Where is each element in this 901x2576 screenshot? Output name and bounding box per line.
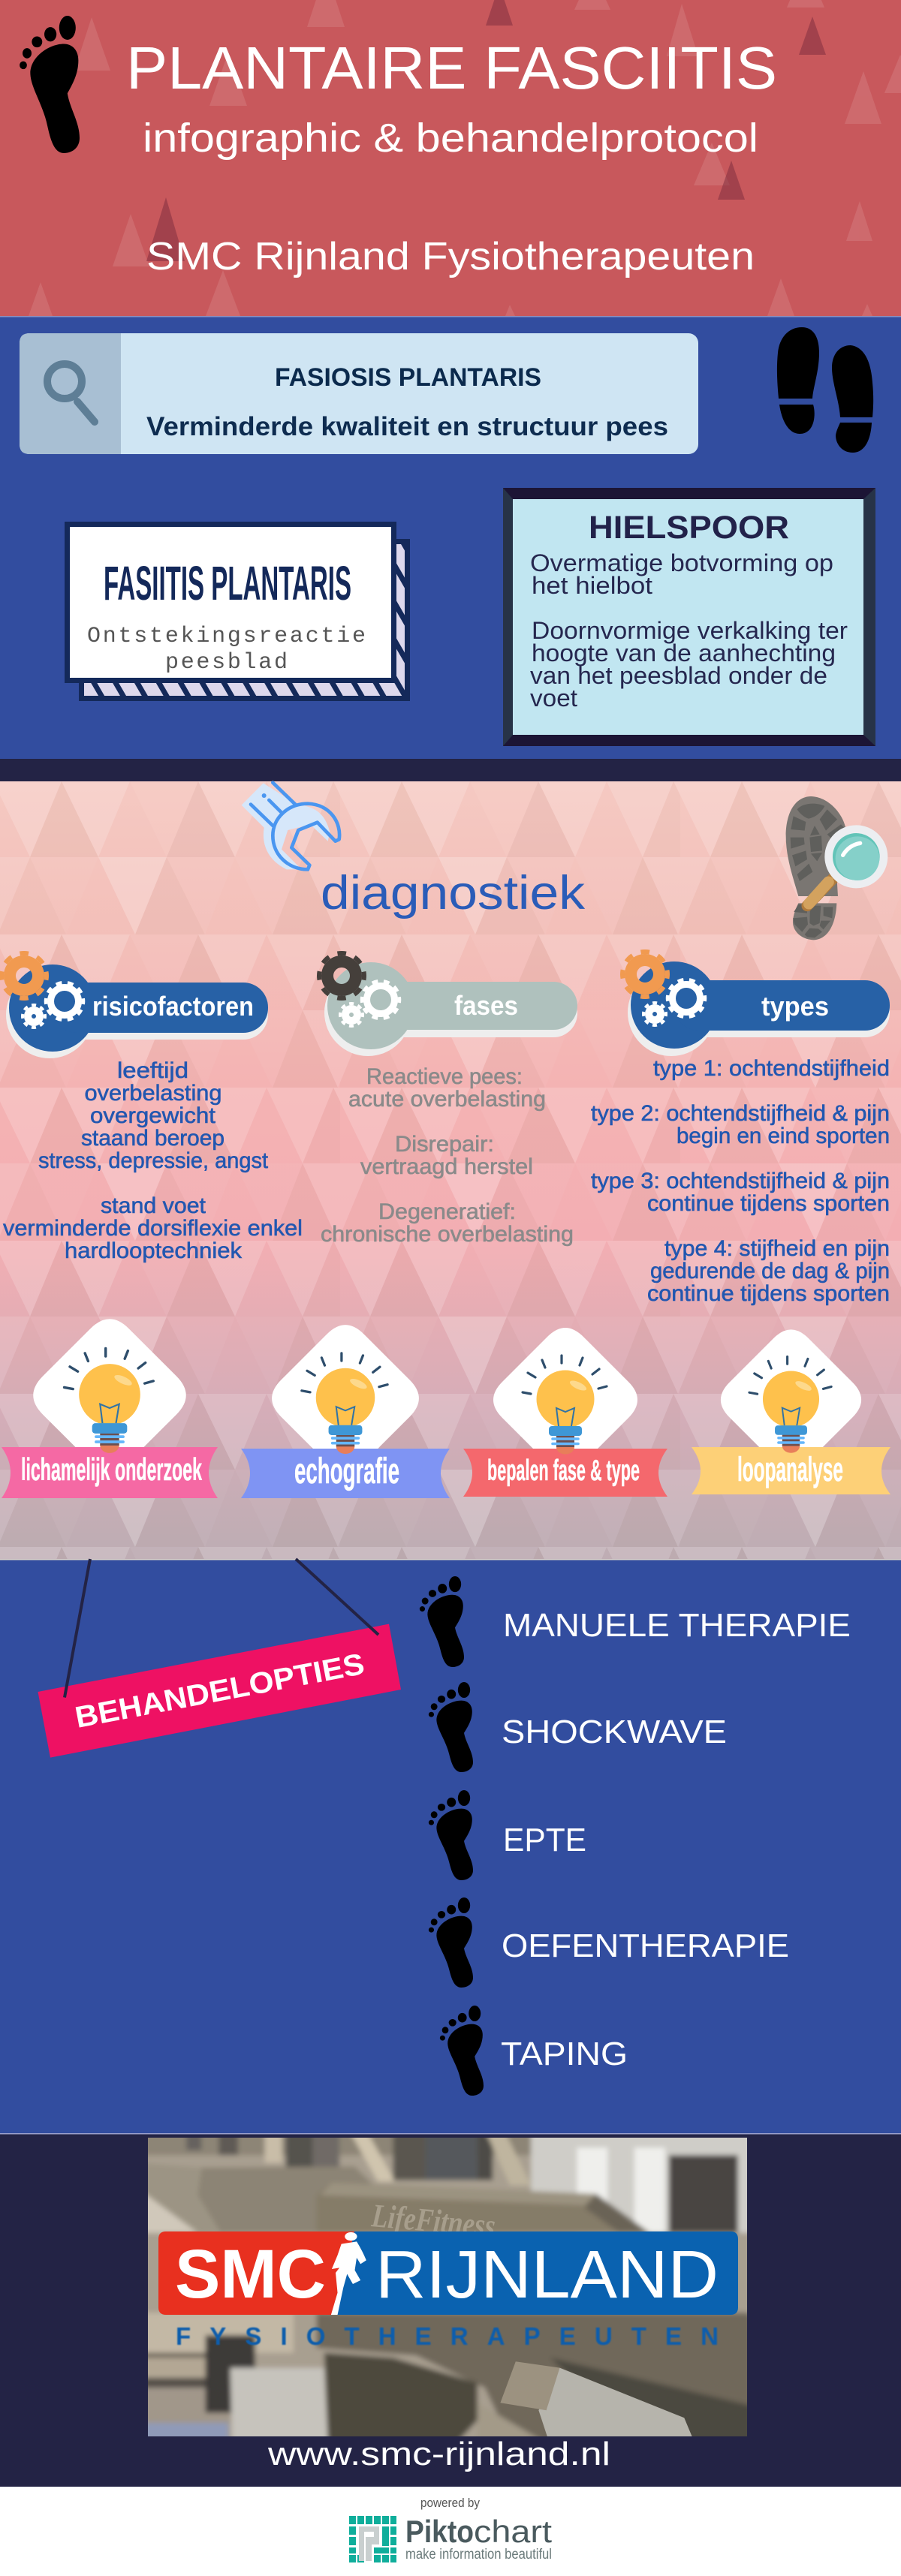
text: ontstekingsreactie peesblad: peesblad [165, 650, 288, 676]
text: types list: type 4: stijfheid en pijn [664, 1236, 890, 1261]
title: PLANTAIRE FASCIITIS [126, 35, 777, 101]
photo lettering: LifeFitness [369, 2197, 497, 2244]
section: footer contact [0, 2130, 901, 2487]
text: hielspoor description: van het peesblad onder de [530, 662, 827, 689]
label: taping: TAPING [501, 2036, 628, 2072]
text: fases list: acute overbelasting [348, 1087, 546, 1112]
text: fases list: Disrepair: [395, 1132, 494, 1157]
icon: shoe soles [777, 327, 873, 453]
badge: fases [319, 953, 577, 1056]
tile: echografie [241, 1325, 450, 1498]
label: fases: fases [454, 990, 518, 1021]
text: risicofactoren list: stress, depressie, angst [38, 1148, 269, 1173]
label: types: types [761, 991, 829, 1022]
text: risicofactoren list: verminderde dorsiflexie enkel [3, 1216, 303, 1241]
text: types list: begin en eind sporten [677, 1124, 890, 1148]
label: oefentherapie: OEFENTHERAPIE [502, 1927, 789, 1964]
text: risicofactoren list [3, 1058, 303, 1263]
text: risicofactoren list: leeftijd [117, 1058, 188, 1083]
text: verminderde kwaliteit: Verminderde kwaliteit en structuur pees [146, 412, 668, 441]
section: header banner [0, 0, 901, 316]
panel: fasiitis plantaris card [68, 524, 407, 698]
tile: lichamelijk onderzoek [2, 1319, 218, 1498]
text: hielspoor description: voet [530, 685, 577, 712]
heading: fasiosis plantaris: FASIOSIS PLANTARIS [275, 363, 541, 392]
tile: bepalen fase en type [463, 1328, 667, 1497]
sign: behandelopties: BEHANDELOPTIES [73, 1648, 367, 1735]
icon: foot 4 [429, 1897, 473, 1988]
image: gym photo with logo [140, 2130, 761, 2445]
text: hielspoor description: hoogte van de aanhechting [532, 639, 836, 667]
text: risicofactoren list: stand voet [101, 1193, 206, 1218]
text: fases list: Reactieve pees: [366, 1064, 523, 1089]
text: fases list: vertraagd herstel [360, 1154, 533, 1179]
logo runner [331, 2232, 366, 2315]
icon: wrench [242, 783, 339, 869]
text: hielspoor description [530, 549, 848, 712]
text: risicofactoren list: hardlooptechniek [65, 1238, 243, 1263]
icon: foot 5 [440, 2006, 484, 2096]
tile: bepalen fase en type: bepalen fase & type [487, 1455, 640, 1487]
section: diagnostiek [0, 781, 901, 1559]
badge: types [622, 952, 890, 1056]
text: ontstekingsreactie peesblad [87, 624, 366, 676]
subtitle: infographic & behandelprotocol [143, 116, 758, 161]
logo: smc rijnland: RIJNLAND [375, 2237, 719, 2313]
text: types list [591, 1056, 890, 1306]
text: hielspoor description: Overmatige botvorming op [530, 549, 833, 576]
label: risicofactoren: risicofactoren [92, 991, 254, 1022]
text: hielspoor description: Doornvormige verkalking ter [532, 617, 848, 644]
icon: foot 3 [429, 1790, 473, 1880]
website url: www.smc-rijnland.nl [267, 2436, 610, 2472]
heading: fasiitis plantaris: FASIITIS PLANTARIS [104, 556, 351, 610]
label: shockwave: SHOCKWAVE [502, 1714, 727, 1750]
text: types list: continue tijdens sporten [647, 1191, 890, 1216]
wordmark: piktochart: Pikto [405, 2514, 474, 2549]
tile: loopanalyse [692, 1329, 890, 1494]
photo plate [538, 2367, 692, 2436]
text: powered by: powered by [420, 2496, 480, 2510]
wordmark: piktochart: make information beautiful [405, 2547, 552, 2562]
badge: risicofactoren [2, 953, 268, 1058]
label: manuele therapie: MANUELE THERAPIE [503, 1607, 851, 1644]
icon: magnifier [47, 364, 95, 422]
text: fases list: Degeneratief: [378, 1199, 516, 1224]
heading: diagnostiek: diagnostiek [321, 867, 586, 919]
section: behandelopties [0, 1559, 901, 2133]
text: types list: type 2: ochtendstijfheid & pijn [591, 1101, 890, 1126]
icon: piktochart mark [349, 2516, 396, 2562]
section: definitions [0, 316, 901, 759]
tile: lichamelijk onderzoek: lichamelijk onderzoek [21, 1452, 202, 1487]
text: risicofactoren list: staand beroep [81, 1126, 224, 1151]
icon: foot 1 [420, 1576, 464, 1667]
heading: hielspoor: HIELSPOOR [589, 510, 789, 546]
text: types list: gedurende de dag & pijn [650, 1259, 890, 1283]
section: powered by footer [0, 2487, 901, 2576]
text: types list: type 1: ochtendstijfheid [653, 1056, 890, 1081]
icon: foot 2 [429, 1682, 473, 1772]
text: types list: continue tijdens sporten [647, 1281, 890, 1306]
sign: behandelopties [38, 1559, 401, 1758]
panel: fasiosis plantaris search bar [20, 333, 698, 454]
text: types list: type 3: ochtendstijfheid & pijn [591, 1169, 890, 1193]
organisation name: SMC Rijnland Fysiotherapeuten [146, 235, 755, 278]
text: risicofactoren list: overbelasting [84, 1081, 222, 1106]
wordmark: piktochart [405, 2514, 552, 2562]
icon: foot [20, 16, 80, 153]
text: hielspoor description: het hielbot [532, 572, 652, 599]
label: epte: EPTE [503, 1822, 586, 1858]
logo: smc rijnland: FYSIOTHERAPEUTEN [176, 2322, 719, 2350]
text: fases list: chronische overbelasting [321, 1222, 574, 1247]
logo: smc rijnland: SMC [175, 2236, 326, 2313]
text: risicofactoren list: overgewicht [90, 1103, 216, 1128]
text: ontstekingsreactie peesblad: Ontstekingsreactie [87, 624, 366, 649]
tile: echografie: echografie [294, 1452, 399, 1491]
wordmark: piktochart: chart [474, 2514, 552, 2549]
panel: hielspoor [503, 488, 875, 746]
icon: shoe sole with magnifier [786, 796, 887, 940]
logo: smc rijnland [158, 2231, 738, 2350]
dark divider band [0, 759, 901, 781]
text: fases list [321, 1064, 574, 1247]
